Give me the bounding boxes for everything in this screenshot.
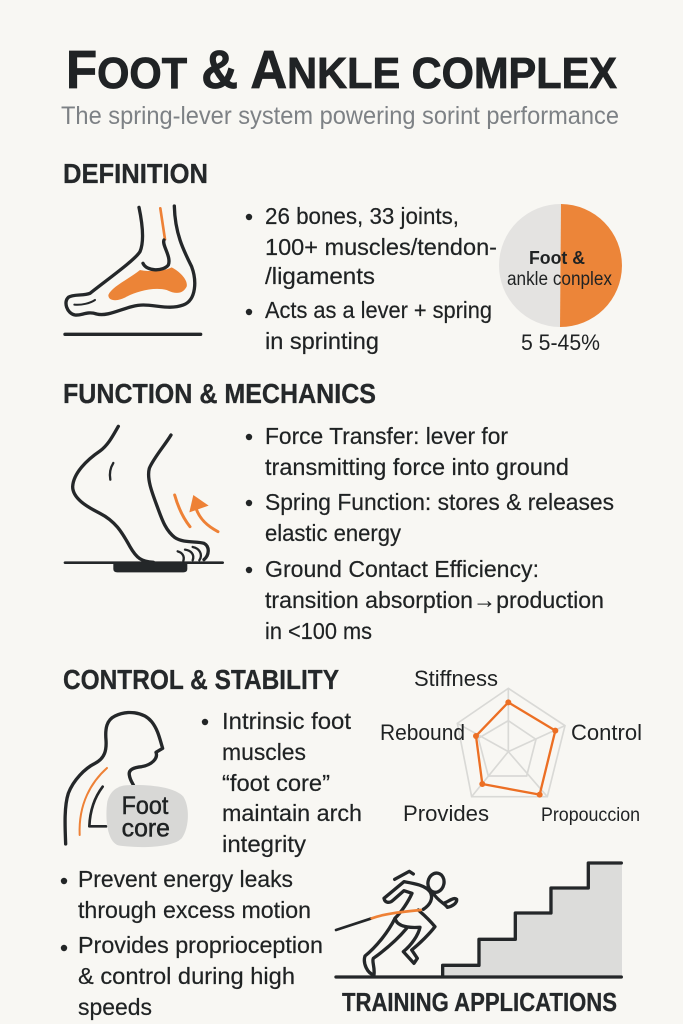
bullet list: definition: /ligaments	[265, 263, 375, 289]
bullet list: definition: in sprinting	[265, 328, 379, 354]
bullet list: intrinsic foot muscles: muscles	[222, 739, 306, 765]
icon: figure with foot core label	[65, 713, 188, 847]
bullet list: function and mechanics: transition absorption→production	[265, 587, 604, 613]
heading: function and mechanics: FUNCTION & MECHANICS	[63, 378, 376, 409]
bullet list: intrinsic foot muscles: integrity	[222, 831, 307, 857]
icon: foot pushing off ground with arrow	[65, 426, 223, 572]
bullet list: energy leaks and proprioception: through excess motion	[78, 897, 311, 923]
pie chart: foot and ankle complex share: ankle conplex	[507, 269, 612, 290]
bullet list: energy leaks and proprioception	[61, 866, 323, 1020]
title: FOOT & ANKLE COMPLEX	[66, 40, 617, 100]
bullet list: energy leaks and proprioception: speeds	[78, 994, 152, 1020]
radar chart: Provides	[403, 801, 489, 826]
bullet list: definition	[246, 203, 497, 354]
bullet list: energy leaks and proprioception: Prevent energy leaks	[78, 866, 293, 892]
pie chart: foot and ankle complex share: 5 5-45%	[521, 330, 600, 355]
bullet list: intrinsic foot muscles	[202, 708, 362, 857]
bullet list: function and mechanics: in <100 ms	[265, 618, 372, 644]
pie chart: foot and ankle complex share: Foot &	[529, 248, 585, 268]
panel: training applications	[336, 863, 622, 1017]
icon: foot with orange arch	[65, 206, 201, 334]
bullet list: intrinsic foot muscles: Intrinsic foot	[222, 708, 352, 734]
pie chart: foot and ankle complex share	[499, 204, 622, 355]
panel: definition	[63, 158, 622, 355]
bullet list: function and mechanics: Spring Function: stores & releases	[265, 489, 614, 515]
radar chart: Control	[571, 720, 642, 745]
radar chart	[380, 666, 642, 826]
heading: definition: DEFINITION	[63, 158, 208, 189]
radar chart: Stiffness	[414, 666, 498, 691]
heading: training applications: TRAINING APPLICATIONS	[342, 987, 617, 1017]
illustration: sprinter and stairs	[336, 863, 622, 977]
icon: figure with foot core label: Foot	[122, 792, 168, 820]
bullet list: function and mechanics	[246, 423, 614, 644]
radar chart: Propouccion	[541, 805, 640, 826]
subtitle: The spring-lever system powering sorint performance	[61, 102, 619, 130]
bullet list: intrinsic foot muscles: maintain arch	[222, 800, 362, 826]
panel: function and mechanics	[63, 378, 614, 644]
bullet list: function and mechanics: Force Transfer: lever for	[265, 423, 508, 449]
heading: control and stability: CONTROL & STABILITY	[63, 664, 339, 695]
bullet list: definition: Acts as a lever + spring	[265, 297, 492, 323]
bullet list: definition: 26 bones, 33 joints,	[265, 203, 459, 229]
panel: control and stability	[61, 664, 642, 1020]
bullet list: definition: 100+ muscles/tendon-	[265, 234, 497, 260]
bullet list: energy leaks and proprioception: & control during high	[78, 963, 295, 989]
radar chart: Rebound	[380, 720, 465, 745]
bullet list: function and mechanics: elastic energy	[265, 520, 401, 546]
bullet list: function and mechanics: Ground Contact Efficiency:	[265, 556, 539, 582]
bullet list: function and mechanics: transmitting force into ground	[265, 454, 569, 480]
bullet list: intrinsic foot muscles: “foot core”	[222, 770, 330, 796]
icon: figure with foot core label: core	[122, 815, 170, 843]
bullet list: energy leaks and proprioception: Provides proprioception	[78, 932, 323, 958]
